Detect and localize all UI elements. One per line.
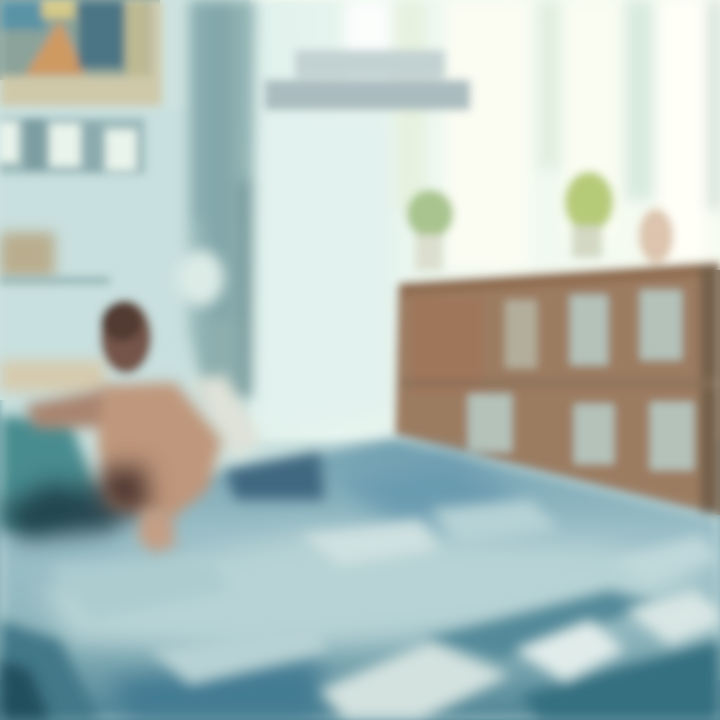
white pillow (190, 375, 262, 460)
person lying on the bed (0, 301, 262, 553)
small terracotta pot (639, 209, 673, 263)
lower arm and hand (138, 510, 176, 553)
teal pillow (0, 415, 100, 530)
sheer curtain folds (345, 0, 720, 270)
arm (25, 388, 120, 428)
scattered papers on the bed (50, 500, 720, 720)
wooden cabinet (395, 262, 720, 517)
framed painting (0, 0, 162, 106)
head (101, 301, 151, 373)
bed covers (0, 438, 720, 720)
potted plant: left (407, 190, 453, 271)
blurred hanging sign (265, 50, 470, 110)
cabinet glass panels (468, 290, 694, 470)
torso (97, 382, 222, 520)
dark teal curtain (188, 0, 256, 400)
row of small wall frames (0, 118, 145, 174)
dark blanket under person (0, 482, 130, 540)
lamp glow beside curtain (176, 250, 224, 306)
wooden headboard (0, 360, 105, 392)
wall shelf with basket (0, 232, 110, 285)
potted plant: right (565, 172, 613, 258)
